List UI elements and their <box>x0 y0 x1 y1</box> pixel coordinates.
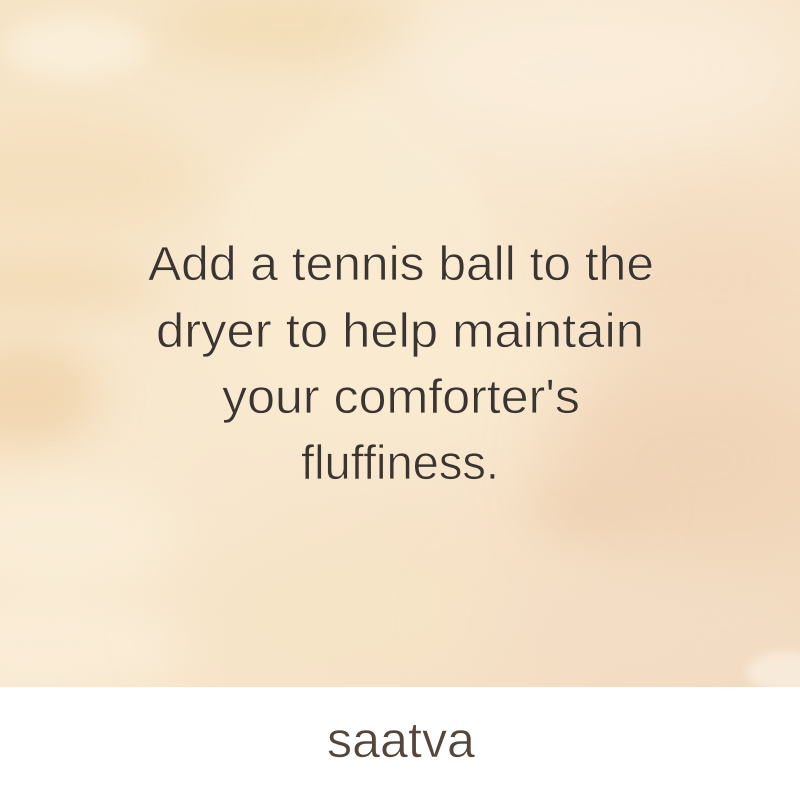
tip text: Add a tennis ball to the <box>148 238 654 291</box>
tip text <box>148 238 654 490</box>
tip text: dryer to help maintain <box>156 305 644 358</box>
logo: saatva: saatva <box>327 712 475 768</box>
tip text: fluffiness. <box>301 437 499 490</box>
footer band <box>0 687 800 800</box>
tip text: your comforter's <box>222 371 580 424</box>
